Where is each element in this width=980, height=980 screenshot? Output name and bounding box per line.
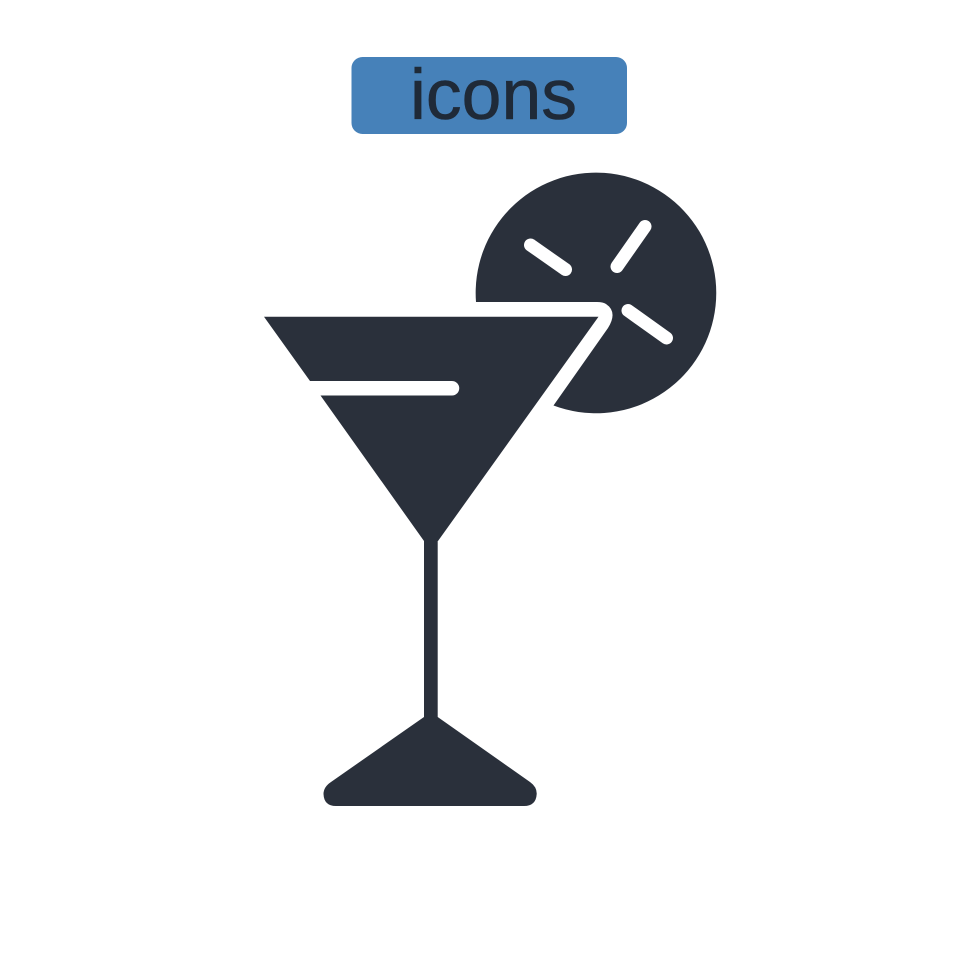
badge text: icons	[410, 56, 577, 135]
icon: cocktail glass with citrus slice	[264, 173, 716, 806]
glass bowl upper part	[264, 317, 598, 541]
glass foot	[324, 717, 537, 806]
citrus segment mark: upper left	[530, 245, 566, 270]
citrus body	[476, 173, 716, 413]
glass stem	[424, 538, 438, 720]
citrus segment mark: lower right	[628, 310, 666, 338]
badge: icons label	[352, 56, 627, 135]
icon: citrus slice	[476, 173, 716, 413]
badge background	[352, 57, 627, 134]
citrus segment mark: upper right	[617, 226, 645, 266]
